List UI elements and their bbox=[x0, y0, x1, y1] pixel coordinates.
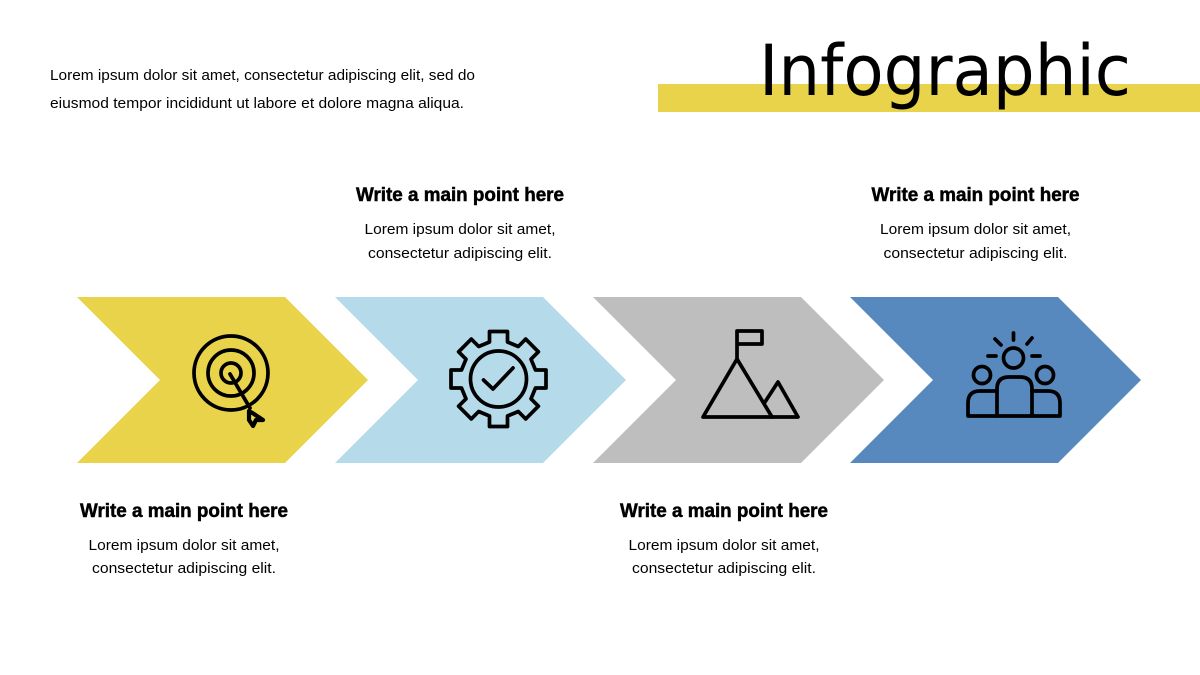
step 3 text: Write a main point here bbox=[620, 500, 828, 522]
intro text: eiusmod tempor incididunt ut labore et dolore magna aliqua. bbox=[50, 95, 464, 112]
chevron 1 bbox=[77, 297, 368, 463]
icon: gear with check bbox=[451, 332, 546, 426]
step 2 text: consectetur adipiscing elit. bbox=[368, 245, 552, 262]
step 4 text bbox=[872, 184, 1080, 262]
step 1 text bbox=[80, 500, 288, 577]
icon: mountain with flag bbox=[703, 331, 798, 417]
title highlight bar bbox=[658, 84, 1200, 112]
step 2 text: Lorem ipsum dolor sit amet, bbox=[364, 221, 556, 238]
step 2 text bbox=[356, 184, 564, 262]
chevron 3 bbox=[593, 297, 884, 463]
step 3 text: Lorem ipsum dolor sit amet, bbox=[628, 537, 820, 554]
step 3 text: consectetur adipiscing elit. bbox=[632, 560, 816, 577]
step 4 text: Write a main point here bbox=[872, 184, 1080, 206]
icon: target bbox=[194, 336, 268, 426]
step 1 text: Write a main point here bbox=[80, 500, 288, 522]
icon: team bbox=[968, 333, 1060, 416]
intro text bbox=[50, 67, 475, 112]
step 2 text: Write a main point here bbox=[356, 184, 564, 206]
intro text: Lorem ipsum dolor sit amet, consectetur adipiscing elit, sed do bbox=[50, 67, 475, 84]
step 4 text: Lorem ipsum dolor sit amet, bbox=[880, 221, 1071, 238]
step 1 text: consectetur adipiscing elit. bbox=[92, 560, 276, 577]
chevron 4 bbox=[850, 297, 1141, 463]
title: Infographic bbox=[759, 30, 1131, 112]
chevron 2 bbox=[335, 297, 626, 463]
step 3 text bbox=[620, 500, 828, 577]
step 1 text: Lorem ipsum dolor sit amet, bbox=[88, 537, 280, 554]
step 4 text: consectetur adipiscing elit. bbox=[884, 245, 1068, 262]
